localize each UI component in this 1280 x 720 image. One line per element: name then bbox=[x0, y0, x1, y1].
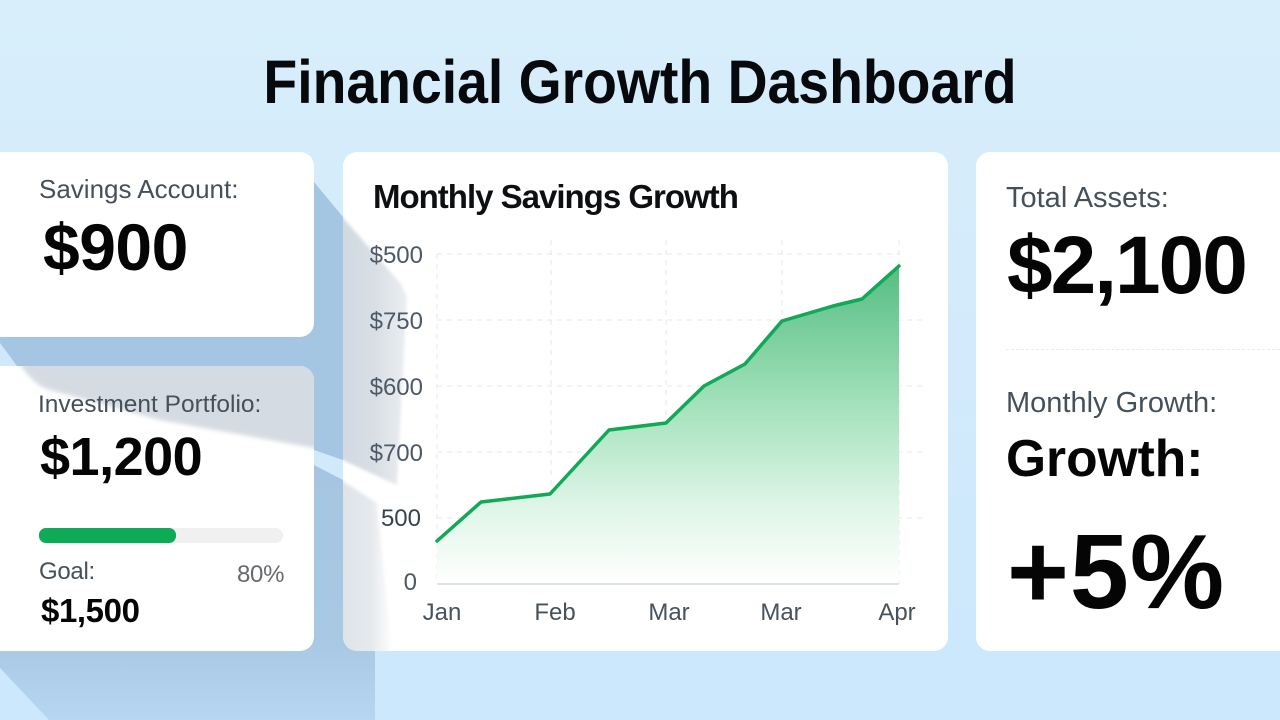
area fill bbox=[437, 266, 899, 584]
cast shadow on investment panel bbox=[19, 366, 314, 450]
growth heading: Growth: bbox=[1006, 429, 1203, 487]
chart heading: Monthly Savings Growth bbox=[373, 178, 738, 215]
savings value: $900 bbox=[43, 210, 188, 284]
x axis labels: Feb bbox=[534, 599, 576, 626]
x axis labels: Jan bbox=[423, 599, 461, 626]
y axis labels: $500 bbox=[370, 242, 423, 269]
x axis labels bbox=[423, 599, 916, 626]
x axis labels: Apr bbox=[878, 599, 916, 626]
panel: savings account bbox=[0, 152, 314, 337]
y axis labels: 0 bbox=[404, 569, 417, 596]
growth line bbox=[437, 266, 899, 541]
y axis labels: 500 bbox=[381, 505, 421, 532]
progress fill bbox=[39, 528, 176, 543]
cast shadow on chart panel bbox=[343, 216, 407, 651]
x axis labels: Mar bbox=[648, 599, 690, 626]
y axis labels: $750 bbox=[370, 308, 423, 335]
y axis labels bbox=[370, 242, 423, 596]
goal value: $1,500 bbox=[41, 592, 140, 629]
panel: monthly savings growth bbox=[343, 152, 948, 651]
axis line bbox=[437, 583, 899, 585]
monthly growth label: Monthly Growth: bbox=[1006, 387, 1217, 419]
total assets value: $2,100 bbox=[1007, 220, 1246, 311]
title: Financial Growth Dashboard bbox=[263, 48, 1017, 116]
total assets label: Total Assets: bbox=[1006, 182, 1169, 214]
savings label: Savings Account: bbox=[39, 174, 238, 204]
investment value: $1,200 bbox=[40, 427, 202, 487]
goal label: Goal: bbox=[39, 558, 95, 585]
growth value: +5% bbox=[1007, 513, 1225, 631]
progress bar bbox=[39, 528, 283, 543]
investment label: Investment Portfolio: bbox=[38, 391, 261, 418]
x axis labels: Mar bbox=[760, 599, 802, 626]
percent label: 80% bbox=[237, 561, 284, 588]
y axis labels: $600 bbox=[370, 374, 423, 401]
divider bbox=[1006, 349, 1280, 350]
line chart bbox=[370, 240, 922, 626]
panel: totals bbox=[976, 152, 1280, 651]
y axis labels: $700 bbox=[370, 440, 423, 467]
panel: investment portfolio bbox=[0, 366, 314, 651]
